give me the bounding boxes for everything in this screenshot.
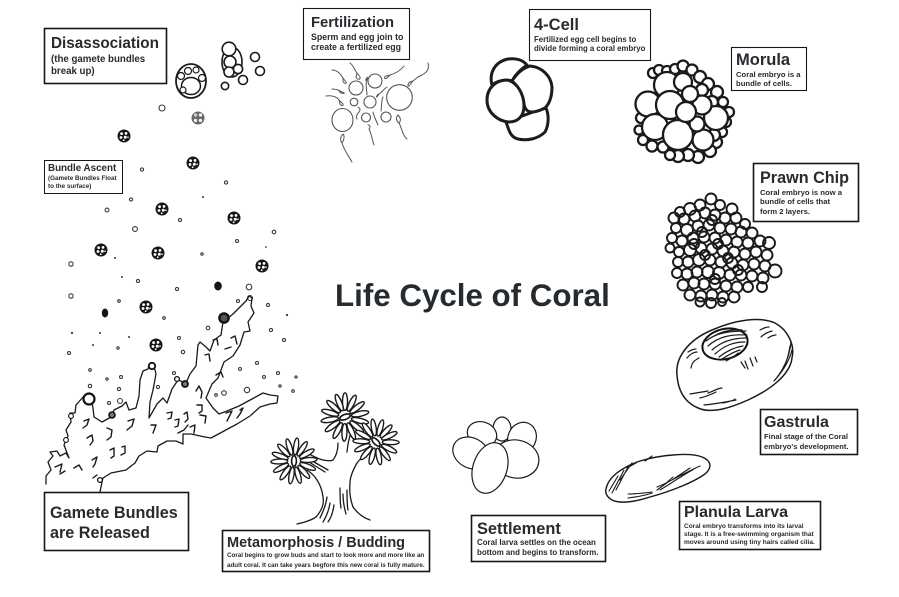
illustration: rising gamete bundles [68,42,297,404]
illustration: planula larva [606,454,710,502]
bottom cell [506,108,548,140]
heading: Morula [736,51,791,69]
label: morula [732,48,806,90]
description: (the gamete bundles [51,54,145,65]
illustration: settlement flower [447,417,542,498]
illustration: 4-cell embryo [487,59,552,140]
larva hatching [609,456,700,498]
heading: Bundle Ascent [48,163,117,174]
right cell [512,66,552,112]
description: embryo's development. [764,442,849,451]
heading: are Released [50,524,150,542]
title: Life Cycle of Coral [335,278,610,313]
back petals [493,417,511,441]
label: gastrula [760,410,858,454]
illustration: fertilization sperm and eggs [326,63,428,162]
icon: breaking bundle cluster [221,42,264,90]
coral surface marks [55,336,243,478]
front petal [466,438,514,498]
illustration: gastrula [677,319,793,410]
sperm [326,63,428,162]
description: create a fertilized egg [311,42,401,52]
top left cell [491,59,527,85]
illustration: prawn chip embryo [666,194,782,308]
label: bundle ascent [44,160,122,194]
description: divide forming a coral embryo [534,44,646,53]
description: Coral larva settles on the ocean [477,538,596,547]
label: 4-cell [530,10,650,60]
illustration: branching coral releasing bundles [46,296,278,492]
description: stage. It is a free-swimming organism that [684,531,815,538]
illustration: morula [634,60,734,163]
hatching [687,327,792,405]
larva body [606,454,710,502]
heading: Gastrula [764,414,829,431]
description: Fertilized egg cell begins to [534,35,636,44]
left cell [487,80,524,122]
heading: Gamete Bundles [50,504,178,522]
label: gamete bundles released [44,492,188,550]
description: Sperm and egg join to [311,32,404,42]
description: form 2 layers. [760,207,810,216]
description: Final stage of the Coral [764,432,848,441]
label: metamorphosis and budding [222,530,430,572]
heading: 4-Cell [534,16,579,34]
heading: Settlement [477,520,561,538]
gastrula body [677,319,793,410]
label: planula larva [680,502,820,550]
illustration: budding coral polyps [264,393,407,524]
heading: Fertilization [311,15,394,31]
label: settlement [472,516,606,562]
polyp right [345,411,407,473]
description: break up) [51,66,95,77]
description: bundle of cells that [760,197,830,206]
coral polyp buds [64,313,229,482]
icon: large dissociating bundle [176,64,206,98]
coral outline [46,296,278,492]
icon: small scattered eggs [68,105,297,404]
description: Coral embryo is now a [760,188,843,197]
description: Coral embryo transforms into its larval [684,523,804,530]
polyp left [264,431,324,491]
description: to the surface) [48,183,91,190]
description: moves around using tiny hairs called cilia. [684,539,815,546]
description: (Gamete Bundles Float [48,175,117,182]
trunk [297,425,370,524]
side petals [447,431,495,475]
description: bottom and begins to transform. [477,548,598,557]
description: Coral embryo is a [736,70,801,79]
heading: Planula Larva [684,504,788,521]
heading: Prawn Chip [760,169,849,187]
label: prawn chip [754,164,858,222]
label: disassociation [44,28,166,84]
heading: Metamorphosis / Budding [227,535,405,551]
blastopore opening [699,324,751,364]
description: bundle of cells. [736,79,792,88]
description: adult coral. It can take years begfore this new coral is fully mature. [227,562,425,569]
label: fertilization [304,8,410,60]
icon: gamete bundles [94,112,268,352]
description: Coral begins to grow buds and start to look more and more like an [227,552,424,559]
polyp top [321,393,369,441]
eggs [332,74,412,132]
heading: Disassociation [51,35,159,52]
